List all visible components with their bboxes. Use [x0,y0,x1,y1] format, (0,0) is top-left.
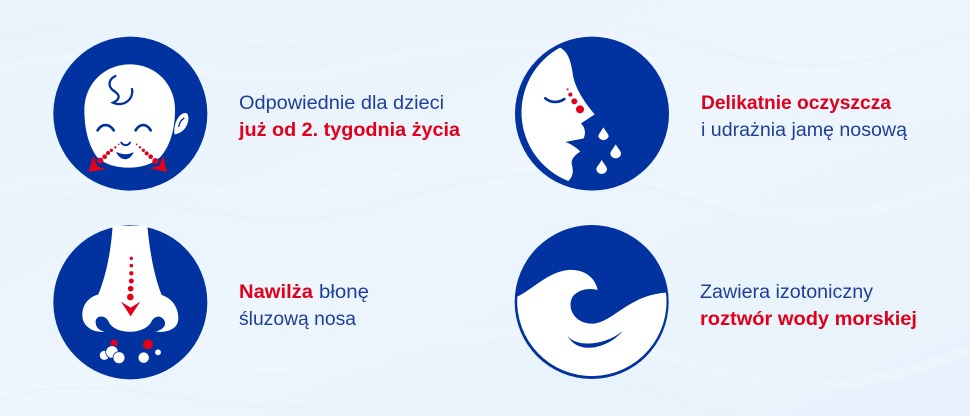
text: gently cleanses: Delikatnie oczyszcza [701,93,891,114]
icon: face profile with droplets [515,37,669,191]
text: isotonic seawater: Zawiera izotoniczny [700,282,874,303]
text: gently cleanses: i udrażnia jamę nosową [701,120,907,141]
icon: sea wave [515,225,669,379]
text: moisturises: śluzową nosa [239,309,356,330]
text: suitable for children [238,93,460,141]
text: suitable for children: Odpowiednie dla dzieci [239,93,444,114]
text: suitable for children: już od 2. tygodnia życia [238,120,460,141]
text: gently cleanses [701,93,907,141]
text: moisturises: błonę [319,282,369,303]
text: moisturises: Nawilża [239,282,313,303]
icon: nose [53,225,207,379]
text: moisturises [239,282,369,330]
text: isotonic seawater [700,282,917,330]
icon: baby face [53,37,207,191]
text: isotonic seawater: roztwór wody morskiej [700,309,917,330]
